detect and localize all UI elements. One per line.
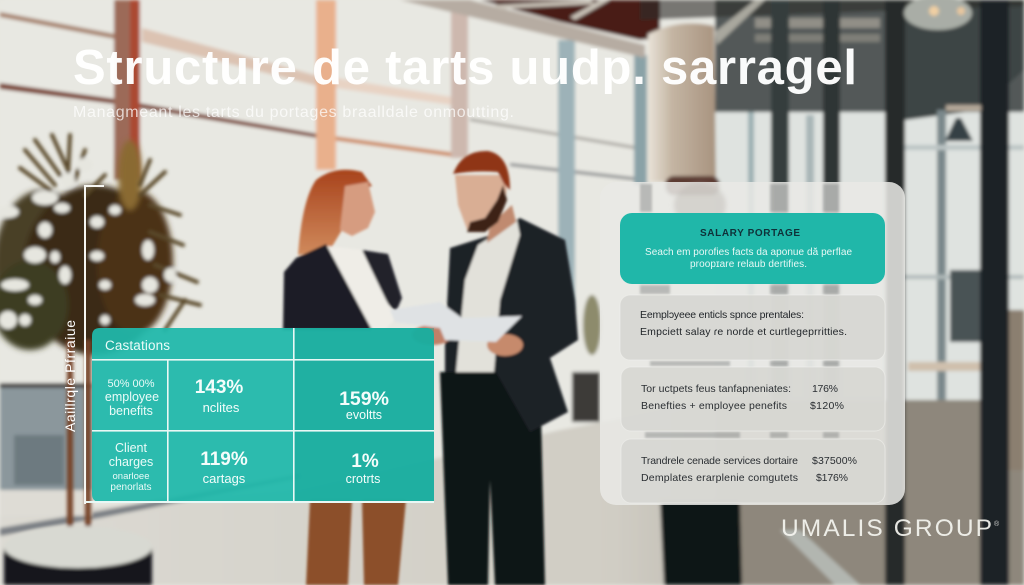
blurred window bars seen through the glass [640,184,839,438]
blouse [327,246,396,330]
floor [0,400,1024,585]
card: benefits: Tor uctpets feus tanfapneniates: [641,383,791,395]
teal header card: proopɪare relaub dertifies. [690,259,807,270]
foliage mass [0,140,173,355]
jacket [283,244,372,330]
row 1 value two: evoltts [346,408,382,422]
darker right column [293,328,434,502]
face [340,182,375,236]
floor reflection [780,530,860,585]
table background [92,328,434,502]
small plant behind [583,295,601,355]
teal header card: SALARY PORTAGE [700,228,800,239]
distant buildings seen through the window [0,385,92,490]
table header: Castations [105,338,170,353]
pot behind the man [572,372,600,422]
ceiling top [480,0,660,40]
trousers [440,372,545,585]
row 1 label: employee [105,390,159,404]
card: employee [620,295,885,360]
row 1 value two: 159% [339,388,389,410]
row 2 label: Client [115,441,148,455]
logo: umalis group: UMALIS GROUP [781,515,992,542]
teal header card: Seach em porofies facts da aponue dă perflae [645,247,852,258]
row 2 label: penorlats [110,482,152,493]
table panel: castations [86,328,434,503]
row 2 value one: 119% [200,449,248,470]
rotated axis label: Aaillrqle Pfrraiue [62,320,78,432]
row 2 label: charges [109,455,153,469]
card: services: $176% [816,472,848,484]
row 1 label [105,378,159,418]
table grid [86,328,434,503]
subtitle: Managmeant les tarts du portages braalldale onmoutting. [73,104,514,121]
teal header card [620,213,885,284]
row 2 label [109,441,153,493]
blurred figure seen through the glass [674,183,726,227]
hair [298,170,372,255]
row 1 value one: 143% [195,377,243,398]
papers [390,302,522,342]
woman [283,170,406,585]
foliage highlights [0,158,176,329]
row 1 label: benefits [109,404,153,418]
card: services: $37500% [812,455,857,467]
glass panel background [600,182,905,505]
row 1 label: 50% 00% [107,378,155,390]
window frames left [0,0,647,310]
face [455,175,508,232]
beard [467,185,507,232]
window frames right [715,0,1024,400]
title: Structure de tarts uudp. sarragel [73,41,857,95]
card: services [621,439,885,503]
row 1 value two [339,388,389,422]
row 1 value one [195,377,243,415]
leaves [20,135,200,330]
neck [487,205,516,243]
row 2 value one [200,449,248,486]
card: employee: Eemplɔyeee enticls spnce prentales: [640,309,804,321]
logo: umalis group: ® [994,520,1000,528]
row 2 value two [346,451,380,486]
ceiling lamps [904,0,972,30]
card: benefits: 176% [812,383,838,395]
card: benefits: $120% [810,400,844,412]
stems [67,340,73,550]
third person [660,176,742,585]
axis lines [84,185,104,504]
row 2 value two: 1% [351,451,379,472]
plant and pot [0,135,200,585]
man [390,151,578,585]
shirt [456,220,520,372]
hands [487,334,523,356]
card: employee: Empciett salay ɾe norde et curtlegeprritties. [640,326,847,338]
row 2 value two: crotrts [346,472,380,486]
dark vertical mullions [771,0,789,400]
card: benefits: Benefties + employee penefits [641,400,787,412]
office furniture [908,362,980,371]
card: benefits [621,367,885,431]
panel: salary portage [600,182,905,505]
row 2 label: onarloee [113,471,149,482]
hair [453,151,510,190]
row 1 value one: nclites [203,400,240,415]
trousers [306,500,352,585]
card: services: Trandrele cenade services dortaire [641,455,798,467]
jacket [445,218,578,432]
row 2 value one: cartags [203,471,246,486]
pot [4,548,152,585]
pillar [648,23,716,182]
card: services: Demplates erarplenie comgutets [641,472,798,484]
